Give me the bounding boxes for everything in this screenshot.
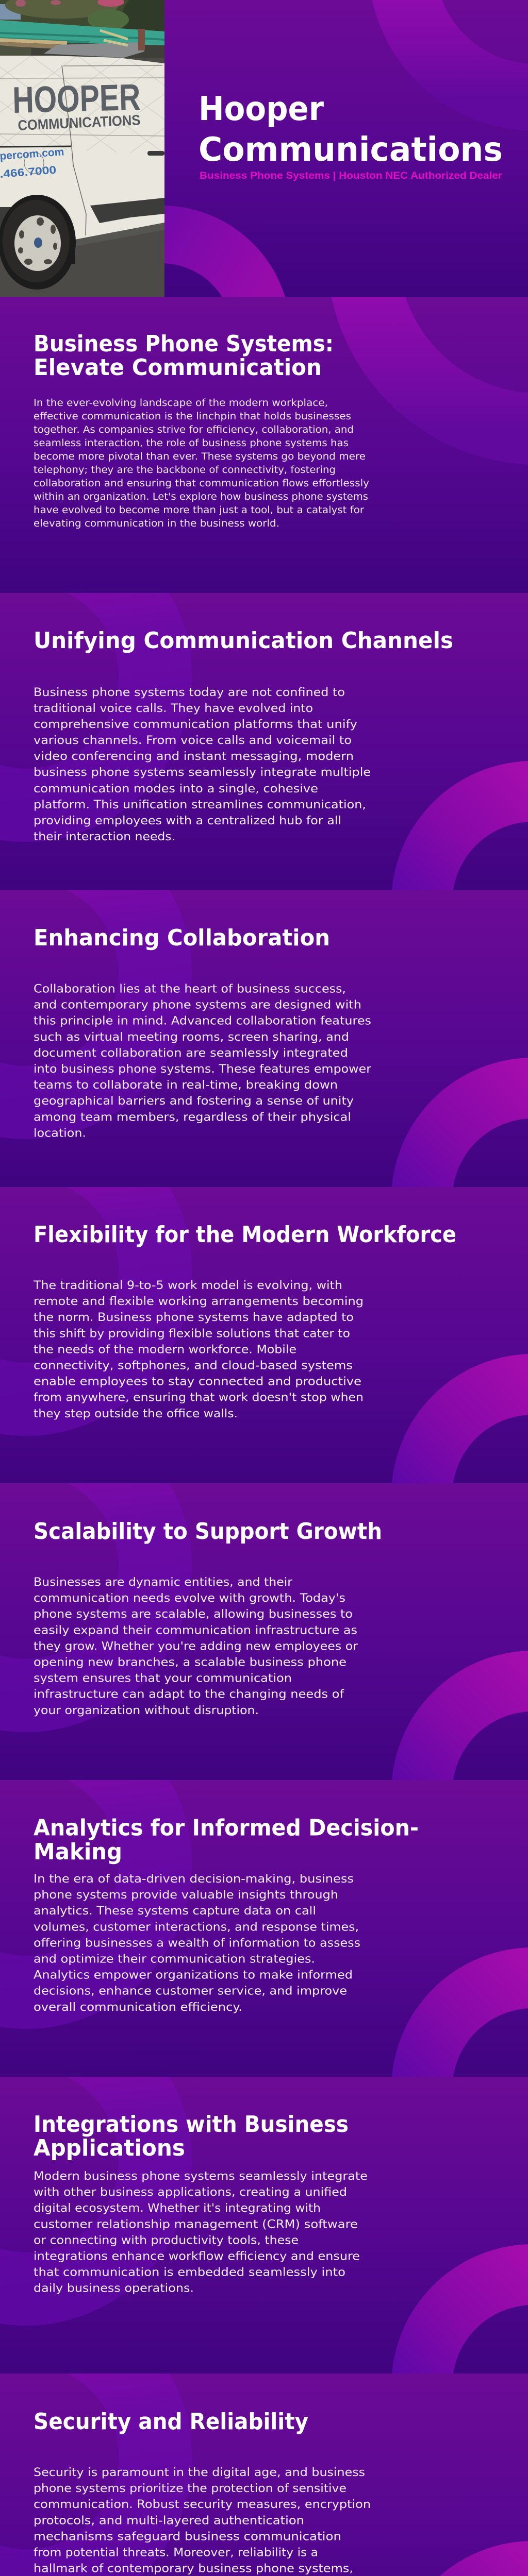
heading: Analytics for Informed Decision- [34,1815,419,1841]
body text: Security is paramount in the digital age, and business [34,2466,365,2479]
body text: daily business operations. [34,2282,194,2295]
body text: among team members, regardless of their physical [34,1111,351,1124]
body text: communication modes into a single, cohesive [34,783,318,795]
body text: phone systems provide valuable insights through [34,1889,338,1902]
body text: become more pivotal than ever. These systems go beyond mere [34,451,366,462]
body text: digital ecosystem. Whether it's integrating with [34,2202,321,2215]
heading: Enhancing Collaboration [34,925,330,951]
body text: video conferencing and instant messaging, modern [34,750,354,763]
body text: and contemporary phone systems are designed with [34,999,361,1012]
panel: Scalability to Support Growth [0,1483,528,1780]
body text: enable employees to stay connected and productive [34,1376,361,1388]
heading: Unifying Communication Channels [34,628,453,654]
body text: location. [34,1127,86,1140]
body text: Modern business phone systems seamlessly integrate [34,2170,368,2183]
body text: phone systems prioritize the protection of sensitive [34,2482,346,2495]
body text: teams to collaborate in real-time, breaking down [34,1079,338,1092]
body text: mechanisms safeguard business communication [34,2530,341,2543]
body text: Businesses are dynamic entities, and their [34,1576,293,1589]
van lettering [0,77,141,180]
van lettering: COMMUNICATIONS [18,112,141,133]
body text: geographical barriers and fostering a sense of unity [34,1095,354,1108]
body text: or connecting with productivity tools, these [34,2234,299,2247]
body text: they grow. Whether you're adding new employees or [34,1640,358,1653]
heading [34,331,334,381]
body text: from anywhere, ensuring that work doesn't stop when [34,1392,364,1404]
body text: In the era of data-driven decision-making, business [34,1873,354,1886]
body text: platform. This unification streamlines communication, [34,799,366,811]
subtitle: Business Phone Systems | Houston NEC Authorized Dealer [200,171,503,181]
body text: decisions, enhance customer service, and improve [34,1985,347,1998]
body text: customer relationship management (CRM) software [34,2218,358,2231]
body text: with other business applications, creating a unified [34,2186,347,2199]
body text: that communication is embedded seamlessly into [34,2266,345,2279]
panel: Security and Reliability [0,2374,528,2576]
heading: Flexibility for the Modern Workforce [34,1222,456,1248]
body text: elevating communication in the business world. [34,518,279,529]
body text [34,983,372,1140]
body text: the norm. Business phone systems have adapted to [34,1311,354,1324]
body text: system ensures that your communication [34,1672,292,1685]
body text: phone systems are scalable, allowing businesses to [34,1608,353,1621]
body text: opening new branches, a scalable business phone [34,1656,346,1669]
body text: their interaction needs. [34,831,175,843]
body text: have evolved to become more than just a tool, but a catalyst for [34,505,364,516]
body text: telephony; they are the backbone of connectivity, fostering [34,465,336,476]
body text: infrastructure can adapt to the changing needs of [34,1688,344,1701]
body text: effective communication is the linchpin that holds businesses [34,411,351,422]
body text: offering businesses a wealth of information to assess [34,1937,360,1950]
body text: within an organization. Let's explore how business phone systems [34,492,368,502]
body text: document collaboration are seamlessly integrated [34,1047,348,1060]
body text: seamless interaction, the role of business phone systems has [34,438,349,449]
panel: Analytics for Informed Decision-Making [0,1780,528,2077]
title: Communications [199,131,503,169]
body text: Analytics empower organizations to make informed [34,1969,353,1982]
body text: hallmark of contemporary business phone systems, [34,2563,353,2575]
body text: communication. Robust security measures, encryption [34,2498,371,2511]
body text: communication needs evolve with growth. Today's [34,1592,345,1605]
body text: overall communication efficiency. [34,2001,242,2014]
heading: Integrations with Business [34,2111,349,2138]
body text: this principle in mind. Advanced collaboration features [34,1015,371,1028]
body text: analytics. These systems capture data on call [34,1905,316,1918]
body text: traditional voice calls. They have evolved into [34,702,313,715]
body text [34,2466,371,2576]
body text: this shift by providing flexible solutions that cater to [34,1327,350,1340]
panel: hero title [164,0,528,297]
body text: such as virtual meeting rooms, screen sharing, and [34,1031,349,1044]
body text: into business phone systems. These features empower [34,1063,372,1076]
panel: Enhancing Collaboration [0,890,528,1187]
panel: Flexibility for the Modern Workforce [0,1187,528,1483]
heading: Scalability to Support Growth [34,1518,382,1545]
heading: Making [34,1839,122,1865]
body text: from potential threats. Moreover, reliability is a [34,2546,318,2560]
body text: integrations enhance workflow efficiency and ensure [34,2250,360,2263]
body text: The traditional 9-to-5 work model is evolving, with [33,1279,342,1292]
title [199,90,503,169]
body text: your organization without disruption. [34,1704,259,1717]
heading: Applications [34,2135,185,2161]
van lettering: .466.7000 [0,164,57,180]
heading: Business Phone Systems: [34,331,334,357]
body text [33,1279,364,1420]
body text: Collaboration lies at the heart of business success, [34,983,346,995]
body text: providing employees with a centralized hub for all [34,815,341,827]
body text [34,686,371,843]
body text: connectivity, softphones, and cloud-based systems [34,1359,353,1372]
body text [34,1873,360,2014]
body text: the needs of the modern workforce. Mobile [34,1343,296,1356]
heading: Security and Reliability [34,2409,308,2435]
body text: business phone systems seamlessly integrate multiple [34,766,371,779]
heading [34,2111,349,2161]
van lettering: percom.com [0,146,64,162]
body text: volumes, customer interactions, and response times, [34,1921,359,1934]
heading: Elevate Communication [34,354,322,381]
body text: collaboration and ensuring that communication flows effortlessly [34,478,369,489]
body text: protocols, and multi-layered authentication [34,2514,304,2527]
body text: together. As companies strive for efficiency, collaboration, and [34,425,354,435]
body text [34,1576,358,1717]
body text [34,398,369,529]
heading [34,1815,419,1865]
body text: remote and flexible working arrangements becoming [34,1295,364,1308]
panel: Integrations with Business Applications [0,2077,528,2374]
panel: hero photo of Hooper Communications van [0,0,164,297]
body text: they step outside the office walls. [34,1408,238,1420]
body text [34,2170,368,2295]
body text: various channels. From voice calls and voicemail to [34,734,352,747]
panel: Unifying Communication Channels [0,593,528,890]
panel: Business Phone Systems intro [0,297,528,593]
body text: Business phone systems today are not confined to [34,686,345,699]
body text: In the ever-evolving landscape of the modern workplace, [34,398,328,409]
body text: comprehensive communication platforms that unify [34,718,357,731]
title: Hooper [199,90,324,128]
body text: and optimize their communication strategies. [34,1953,315,1966]
body text: easily expand their communication infrastructure as [34,1624,357,1637]
